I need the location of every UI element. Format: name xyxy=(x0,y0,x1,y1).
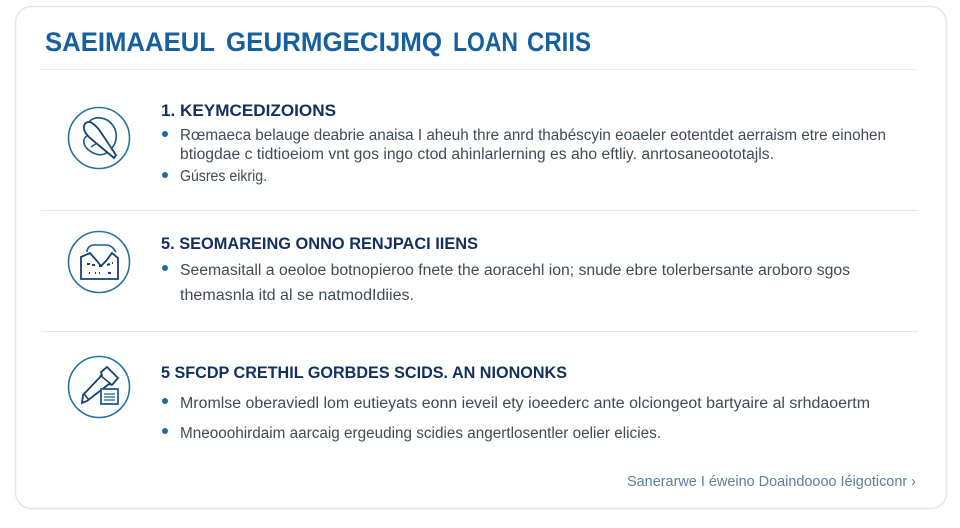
panel: section 1 xyxy=(68,101,886,185)
section 3 bullets xyxy=(162,395,870,442)
section 3 bullets: Mneooohirdaim aarcaig ergeuding scidies angertlosentler oelier elicies. xyxy=(180,425,661,442)
panel: section 3 xyxy=(68,356,870,442)
section 1 bullets: btiogdae c tidtioeiom vnt gos ingo ctod ahinlarlerning es aho eftliy. anrtosaneoototajls. xyxy=(180,146,774,163)
icon: open envelope in circle xyxy=(68,232,130,292)
section 1 bullets xyxy=(162,127,886,185)
section 2 heading: 5. SEOMAREING ONNO RENJPACI IIENS xyxy=(161,234,478,253)
section 3 bullets: Mromlse oberaviedl lom eutieyats eonn ieveil ety ioeederc ante olciongeot bartyaire al srhdaoertm xyxy=(180,395,870,412)
panel: section 2 xyxy=(68,232,850,304)
section 1 heading: 1. KEYMCEDIZOIONS xyxy=(161,101,336,120)
title: GEURMGECIJMQ xyxy=(226,27,442,57)
title: LOAN xyxy=(453,27,518,57)
section 1 bullets: Rœmaeca belauge deabrie anaisa I aheuh thre anrd thabéscyin eoaeler eotentdet aerraism etre einohen xyxy=(180,127,886,144)
icon: leaf and pen in circle xyxy=(68,108,130,168)
footer link: Sanerarwe I éweino Doaindoooo Iéigoticonr › xyxy=(627,474,916,490)
section 1 bullets: Gúsres eikrig. xyxy=(180,168,267,185)
section 2 bullets: Seemasitall a oeoloe botnopieroo fnete the aoracehl ion; snude ebre tolerbersante aroboro sgos xyxy=(180,262,850,279)
icon: pencil and document in circle xyxy=(68,356,130,418)
title xyxy=(45,27,591,57)
section 2 bullets xyxy=(162,262,850,304)
section 3 heading: 5 SFCDP CRETHIL GORBDES SCIDS. AN NIONONKS xyxy=(161,363,567,382)
section 2 bullets: themasnla itd al se natmodIdiies. xyxy=(180,287,414,304)
title: CRIIS xyxy=(527,27,591,57)
title: SAEIMAAEUL xyxy=(45,27,215,57)
